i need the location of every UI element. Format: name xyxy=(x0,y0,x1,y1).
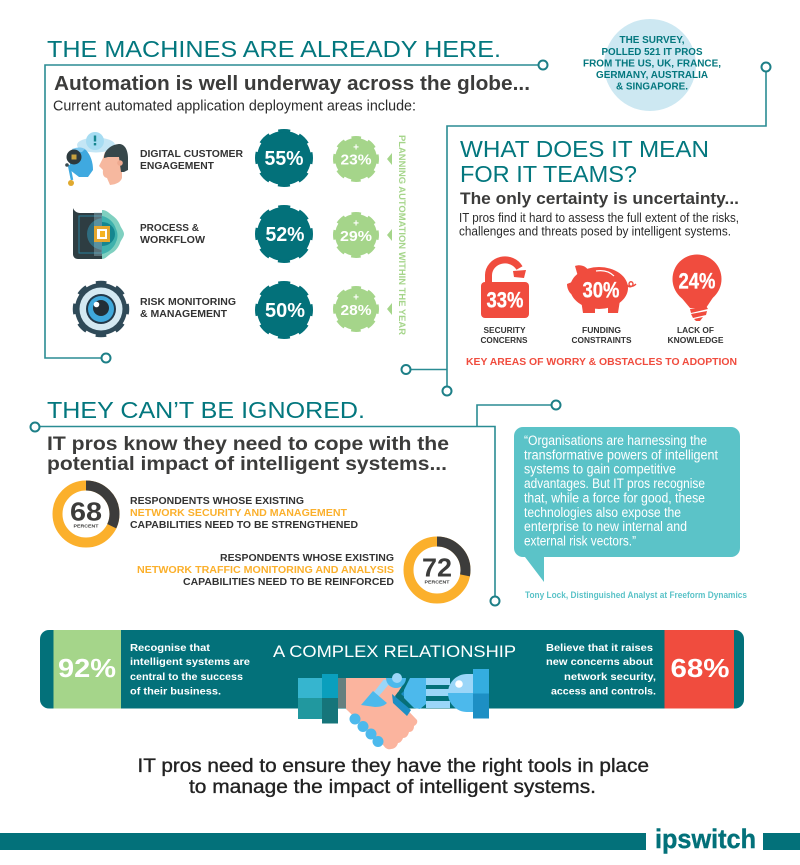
label: process and workflow: PROCESS & xyxy=(140,222,199,234)
label: digital customer engagement: ENGAGEMENT xyxy=(140,160,215,172)
label: security concerns: SECURITY xyxy=(484,325,526,335)
icon: robot and human xyxy=(65,132,128,186)
icon: book and chip xyxy=(73,208,124,259)
closing statement xyxy=(138,756,649,798)
panel: they can't be ignored xyxy=(30,397,560,606)
closing statement: IT pros need to ensure they have the right tools in place xyxy=(138,756,649,777)
callout: survey: & SINGAPORE. xyxy=(616,80,688,92)
text block: network traffic: CAPABILITIES NEED TO BE REINFORCED xyxy=(183,576,394,588)
callout: analyst quote xyxy=(514,427,740,582)
text: believe: access and controls. xyxy=(551,686,656,698)
footer bar xyxy=(0,833,800,850)
subheading: automation: Automation is well underway across the globe... xyxy=(54,73,530,95)
label: process and workflow: WORKFLOW xyxy=(140,234,205,246)
donut chart: 68 percent xyxy=(58,486,114,542)
icon: light bulb 24 percent xyxy=(672,254,722,321)
label: risk monitoring and management: RISK MONITORING xyxy=(140,296,236,308)
label: security concerns xyxy=(480,325,528,345)
arrow xyxy=(387,303,392,315)
donut chart: 72 percent: 72 xyxy=(422,552,452,582)
text: believe xyxy=(546,642,656,698)
subheading: uncertainty: The only certainty is uncertainty... xyxy=(460,190,739,208)
connector: ignored frame xyxy=(30,400,560,606)
gear: 23 percent xyxy=(334,138,378,180)
title: what does it mean: FOR IT TEAMS? xyxy=(460,161,637,187)
subheading: it pros know xyxy=(47,434,449,475)
text: recognise: Recognise that xyxy=(130,642,211,654)
gear: 23 percent: 23% xyxy=(340,152,372,168)
callout: analyst quote: transformative powers of intelligent xyxy=(524,448,718,462)
donut chart: 72 percent: PERCENT xyxy=(424,580,450,584)
gear: 28 percent xyxy=(334,288,378,330)
vertical label: planning automation within the year: PLANNING AUTOMATION WITHIN THE YEAR xyxy=(396,135,407,335)
label: funding constraints xyxy=(572,325,632,345)
gear: 23 percent: + xyxy=(353,142,359,154)
callout: analyst quote: systems to gain competitive xyxy=(524,462,676,476)
callout: analyst quote: enterprise to new internal and xyxy=(524,519,687,534)
logo: ipswitch: ipswitch xyxy=(655,824,756,854)
label: lack of knowledge xyxy=(668,325,724,345)
label: risk monitoring and management xyxy=(140,296,236,320)
closing statement: to manage the impact of intelligent systems. xyxy=(189,777,596,798)
text block: IT pros find it hard to assess the full extent of the risks, xyxy=(459,211,739,225)
callout: survey: FROM THE US, UK, FRANCE, xyxy=(583,58,721,70)
callout: analyst quote: advantages. But IT pros recognise xyxy=(524,476,705,491)
caption: key areas of worry: KEY AREAS OF WORRY & OBSTACLES TO ADOPTION xyxy=(466,356,737,368)
subheading: it pros know: IT pros know they need to cope with the xyxy=(47,434,449,455)
arrow xyxy=(387,229,392,241)
callout: survey xyxy=(583,19,721,111)
gear: 29 percent: 29% xyxy=(340,228,372,245)
gear: 55 percent xyxy=(256,130,312,186)
panel: a complex relationship xyxy=(40,630,744,749)
icon: human and robot handshake xyxy=(298,669,489,749)
text block: network security: NETWORK SECURITY AND MANAGEMENT xyxy=(130,507,348,519)
banner background xyxy=(40,630,744,708)
text: recognise xyxy=(130,642,250,698)
icon: piggy bank 30 percent xyxy=(567,265,636,313)
gear: 55 percent: 55% xyxy=(264,148,304,170)
icon: open padlock 33 percent xyxy=(481,260,529,318)
label: lack of knowledge: LACK OF xyxy=(677,325,714,335)
callout: survey: THE SURVEY, xyxy=(620,34,685,46)
text block: network security: CAPABILITIES NEED TO BE STRENGTHENED xyxy=(130,519,358,531)
callout: analyst quote: that, while a force for good, these xyxy=(524,490,705,506)
text block: network security xyxy=(130,495,358,531)
label: digital customer engagement: DIGITAL CUSTOMER xyxy=(140,148,243,160)
icon: light bulb 24 percent: 24% xyxy=(678,268,716,294)
title: the machines are already here: THE MACHINES ARE ALREADY HERE. xyxy=(47,36,501,62)
callout: survey: POLLED 521 IT PROS xyxy=(602,46,702,58)
gear: 50 percent: 50% xyxy=(265,300,305,322)
text: recognise: of their business. xyxy=(130,686,221,698)
donut chart: 68 percent: 68 xyxy=(70,496,102,526)
stat: 68 percent: 68% xyxy=(670,653,730,683)
connector: it teams frame xyxy=(402,62,770,396)
stat: 68 percent xyxy=(664,630,734,708)
callout: analyst quote: technologies also expose the xyxy=(524,505,681,520)
label: funding constraints: CONSTRAINTS xyxy=(572,335,632,345)
text: believe: network security, xyxy=(564,671,656,683)
arrow xyxy=(387,153,392,165)
subheading: it pros know: potential impact of intelligent systems... xyxy=(47,454,447,475)
stat: 92 percent: 92% xyxy=(58,653,116,683)
title: they can't be ignored: THEY CAN’T BE IGNORED. xyxy=(47,397,365,423)
icon: gear with eye xyxy=(74,282,128,336)
panel: what does it mean for IT teams xyxy=(402,62,770,396)
gear: 50 percent xyxy=(256,282,312,338)
text block: network traffic: RESPONDENTS WHOSE EXISTING xyxy=(220,552,394,564)
callout: analyst quote: “Organisations are harnessing the xyxy=(524,433,707,448)
panel: the machines are already here xyxy=(45,36,548,362)
text: recognise: intelligent systems are xyxy=(130,656,250,668)
gear: 29 percent xyxy=(334,214,378,256)
label: funding constraints: FUNDING xyxy=(582,325,621,335)
connector: machines frame xyxy=(45,60,548,362)
text block: network traffic xyxy=(137,552,394,588)
label: process and workflow xyxy=(140,222,205,246)
label: digital customer engagement xyxy=(140,148,243,172)
donut chart: 68 percent: PERCENT xyxy=(74,524,99,528)
attribution: Tony Lock, Distinguished Analyst at Freeform Dynamics xyxy=(525,590,747,600)
text block xyxy=(459,211,739,238)
text block: network traffic: NETWORK TRAFFIC MONITORING AND ANALYSIS xyxy=(137,564,394,576)
icon: open padlock 33 percent: 33% xyxy=(486,288,524,312)
title: what does it mean: WHAT DOES IT MEAN xyxy=(460,136,709,162)
gear: 29 percent: + xyxy=(353,218,359,230)
label: risk monitoring and management: & MANAGEMENT xyxy=(140,308,228,320)
gear: 52 percent xyxy=(256,206,312,262)
gear: 28 percent: + xyxy=(353,292,359,304)
intro text: Current automated application deployment areas include: xyxy=(53,98,416,114)
label: lack of knowledge: KNOWLEDGE xyxy=(668,335,724,345)
gear: 28 percent: 28% xyxy=(340,302,372,319)
text block: challenges and threats posed by intelligent systems. xyxy=(459,224,731,238)
label: security concerns: CONCERNS xyxy=(480,335,528,345)
callout: analyst quote: external risk vectors.” xyxy=(524,534,636,548)
stat: 92 percent xyxy=(54,630,121,708)
heading: a complex relationship: A COMPLEX RELATIONSHIP xyxy=(273,642,516,661)
text: believe: new concerns about xyxy=(546,656,654,668)
icon: piggy bank 30 percent: 30% xyxy=(582,278,620,302)
title: what does it mean xyxy=(460,136,709,187)
gear: 52 percent: 52% xyxy=(266,224,305,246)
text: believe: Believe that it raises xyxy=(546,642,653,654)
text: recognise: central to the success xyxy=(130,671,243,683)
callout: survey: GERMANY, AUSTRALIA xyxy=(596,69,708,81)
text block: network security: RESPONDENTS WHOSE EXISTING xyxy=(130,495,304,507)
donut chart: 72 percent xyxy=(408,542,466,598)
